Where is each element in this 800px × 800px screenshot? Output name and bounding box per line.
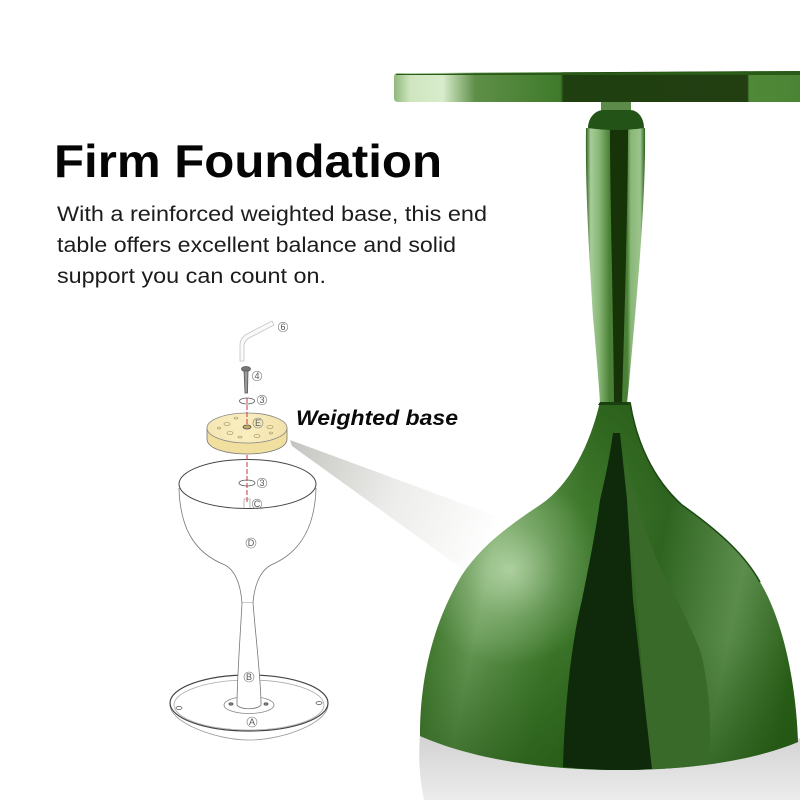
dark central reflection xyxy=(563,433,652,770)
part labels: B xyxy=(246,672,252,682)
post C xyxy=(244,499,250,508)
bowl and neck xyxy=(179,460,316,603)
weighted base puck xyxy=(207,413,287,454)
mid reflection band xyxy=(624,440,710,769)
product: floor shadow xyxy=(419,735,800,800)
part labels: 3 xyxy=(259,478,265,488)
description text xyxy=(57,203,487,288)
upper right dark edge xyxy=(630,402,760,582)
stem xyxy=(586,128,645,403)
part labels: C xyxy=(254,499,261,509)
dashed red axis xyxy=(246,398,248,504)
part labels: E xyxy=(255,418,261,428)
part labels xyxy=(244,322,288,727)
leg xyxy=(237,603,261,709)
callout label: Weighted base xyxy=(296,407,458,430)
collar xyxy=(598,402,630,405)
washer top xyxy=(240,398,254,404)
screw xyxy=(242,366,250,393)
part labels: 3 xyxy=(259,395,265,405)
part labels: 4 xyxy=(254,371,260,381)
washer lower xyxy=(239,480,255,486)
hex key xyxy=(240,321,274,361)
description text: support you can count on. xyxy=(57,265,326,288)
title: Firm Foundation xyxy=(54,135,442,187)
stem cap xyxy=(588,110,644,130)
table top xyxy=(394,71,800,102)
dome base xyxy=(420,402,798,770)
part labels: 6 xyxy=(280,322,286,332)
callout beam xyxy=(290,440,510,578)
assembly diagram xyxy=(170,321,328,740)
description text: With a reinforced weighted base, this end xyxy=(57,203,487,226)
part labels: D xyxy=(248,538,255,548)
description text: table offers excellent balance and solid xyxy=(57,234,456,257)
base plate xyxy=(170,675,328,740)
stem neck xyxy=(601,102,631,112)
product: table xyxy=(394,71,800,770)
part labels: A xyxy=(249,717,255,727)
